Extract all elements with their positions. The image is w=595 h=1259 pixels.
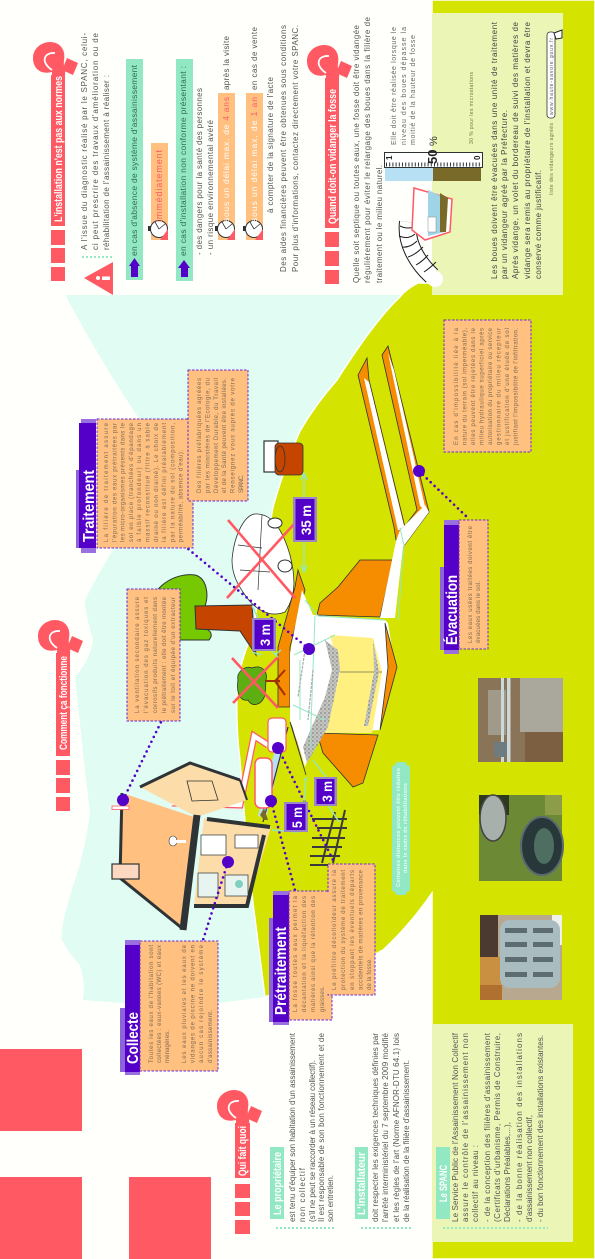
big tree — [150, 575, 256, 655]
description: drainé ou non drainé). Le choix de — [154, 422, 160, 542]
panel: impossibility note: autorisation du propriétaire ou service — [488, 327, 494, 445]
case: no system: en cas d'absence de système d'assainissement — [129, 64, 139, 256]
section: emptying the tank — [307, 13, 563, 295]
prefab text: Renseignez vous auprès de votre — [231, 377, 237, 493]
disposal text: Après vidange, un volet du bordereau de suivi des matières de — [511, 21, 520, 279]
intro text: réhabilitation de l'assainissement à réaliser : — [102, 75, 111, 250]
description: accidentels de matières en provenance — [358, 869, 364, 990]
owner text: non collectif — [298, 1167, 307, 1222]
closing text: Pour plus d'informations, contactez directement votre SPANC. — [291, 25, 300, 272]
panel: traitement — [76, 370, 248, 553]
description: Le Service Public de l'Assainissement Non Collectif — [451, 1032, 460, 1222]
drains — [358, 346, 429, 620]
description: Le préfiltre décolloïdeur assure la — [332, 869, 338, 990]
owner text — [288, 1032, 335, 1222]
description: (Certificats d'urbanisme, Permis de Construire, — [493, 1033, 502, 1222]
title: Collecte — [125, 1012, 142, 1064]
disposal text: Les boues doivent être évacuées dans une unité de traitement — [490, 21, 499, 279]
prefab box — [188, 370, 248, 501]
description: assure le contrôle de l'assainissement non — [461, 1033, 470, 1222]
closing text: à compter de la signature de l'acte — [266, 76, 275, 213]
description: vidanges de piscine ne doivent en — [190, 945, 196, 1063]
photo: manholes — [479, 795, 563, 881]
gauge 50 percent: 50 — [425, 150, 440, 164]
title: Évacuation — [442, 575, 461, 645]
question mark icon — [307, 45, 352, 78]
gauge 50 percent: 1 — [385, 155, 394, 160]
description — [104, 422, 185, 542]
question mark icon — [217, 1090, 262, 1123]
description: perméabilité, absence d'eau). — [179, 450, 185, 542]
description: matières ainsi que la rétention des — [311, 896, 317, 1012]
description: d'assainissement. — [208, 1010, 214, 1063]
delay: immediately — [148, 143, 168, 240]
distance label 5 m: 5 m — [289, 807, 305, 828]
description: par la nature du sol (composition, — [170, 423, 176, 542]
description: Les eaux pluviales et les eaux de — [182, 944, 188, 1063]
sky background — [62, 295, 420, 1003]
prefab text: par les ministères de l'Ecologie, du — [205, 378, 211, 493]
level note: Elle doit être réalisée lorsque le — [391, 27, 398, 145]
distance label 3 m top — [252, 618, 276, 651]
prefab text: Des filières préfabriquées agréées — [197, 378, 203, 493]
description: graisses. — [320, 986, 326, 1012]
panel: ventilation: La ventilation secondaire assure — [135, 596, 141, 713]
delay: 1 year: sous un délai max. de 1 an — [249, 97, 259, 222]
heading — [235, 1123, 250, 1234]
lime ground — [237, 0, 595, 1259]
delay: 4 years: sous un délai max. de 4 ans — [221, 97, 231, 222]
panel: impossibility note: justifiant l'impossibilité de l'infiltration. — [514, 328, 520, 446]
link pill: liste des vidangeurs agréés — [549, 122, 555, 195]
well — [264, 441, 303, 475]
gauge 50 percent: 0 — [473, 155, 482, 160]
note: reduced distances — [392, 762, 410, 895]
case: non compliant: en cas d'installation non conforme présentant : — [178, 66, 188, 256]
heading: Quand doit-on vidanger la fosse — [327, 89, 339, 224]
panel: pretraitement — [269, 864, 375, 1025]
intro text — [352, 16, 384, 283]
intro text: ci peut prescrire des travaux d'amélioration ou de — [91, 32, 100, 250]
panel: ventilation: sur le toit et équipée d'un extracteur — [171, 597, 177, 713]
description: les micro-organismes présents dans le — [121, 422, 127, 542]
description: d'assainissement non collectif, — [525, 1115, 534, 1222]
owner text: Il est responsable de son bon fonctionnement et de — [317, 1032, 326, 1222]
title — [76, 419, 98, 553]
case: no system — [126, 59, 143, 280]
treatment trench — [278, 560, 397, 787]
description: la filière est défini préalablement — [162, 423, 168, 542]
panel: ventilation — [127, 589, 180, 721]
panel: le SPANC — [432, 1024, 573, 1242]
description: - de la conception des filières d'assainissement — [483, 1032, 492, 1222]
description: aucun cas rejoindre le système — [199, 944, 205, 1063]
panel: collecte — [120, 940, 218, 1075]
pretreatment tank and pipe — [172, 718, 305, 822]
prefab text: Développement Durable, du Travail — [214, 378, 220, 493]
installer label: L'installateur — [356, 1151, 368, 1215]
description: ménagères. — [165, 1030, 171, 1063]
description: l'épuration des eaux prétraitées par — [112, 423, 118, 542]
panel: ventilation: l'évacuation des gaz toxiques et — [144, 597, 150, 713]
section: how it works heading — [38, 620, 83, 811]
heading: Qui fait quoi — [237, 1126, 249, 1176]
description: Déclarations Préalables,...), — [503, 1122, 512, 1222]
delay: 4 years — [215, 35, 235, 240]
risk list: - des dangers pour la santé des personnes — [195, 88, 204, 255]
case: non compliant — [176, 59, 193, 281]
installer text — [371, 1032, 411, 1222]
owner text: son entretien. — [326, 1175, 335, 1222]
intro text: Quelle soit septique ou toutes eaux, une fosse doit être vidangée — [352, 24, 361, 283]
panel: impossibility note: nature du terrain (sol imperméable), — [462, 328, 468, 445]
description: La fosse toutes eaux permet la — [293, 895, 299, 1012]
distance label 3 m bottom — [314, 777, 337, 806]
photo: drains in gravel — [478, 678, 563, 762]
description: protection du système de traitement — [341, 870, 347, 990]
small tree with cross — [237, 667, 285, 705]
title: Prétraitement — [273, 926, 290, 1015]
intro text: régulièrement pour éviter le relargage des boues dans la filière de — [363, 16, 372, 283]
prefab text: et de la Santé peuvent être installées. — [222, 378, 228, 493]
description: décantation et la liquéfaction des — [302, 896, 308, 1012]
description: massif reconstitué (filtre à sable — [146, 422, 152, 542]
delay: 4 years: après la visite — [222, 35, 231, 90]
gauge 50 percent — [384, 136, 482, 181]
level note: niveau des boues dépasse la — [401, 27, 408, 145]
distance label 3 m bottom: 3 m — [319, 781, 335, 802]
panel: impossibility note: milieu hydraulique superficiel après — [480, 328, 486, 445]
description — [149, 944, 214, 1063]
panel: impossibility note: gestionnaire du milieu récepteur — [496, 328, 502, 445]
disposal text: par un vidangeur agréé par la Préfecture. — [500, 110, 509, 279]
installer text: et les règles de l'art (Norme AFNOR-DTU 64.1) lois — [392, 1033, 401, 1222]
disposal text: vidange sera remis au propriétaire de l'installation et devra être — [523, 21, 532, 279]
heading — [51, 75, 65, 281]
panel: impossibility note — [444, 320, 531, 452]
closing text — [266, 25, 300, 272]
closing text: Des aides financières peuvent être obtenues sous conditions — [279, 25, 288, 272]
distance label 35 m — [293, 497, 317, 542]
panel: ventilation: le prétraitement : elle doit être montée — [162, 596, 168, 713]
description: de la fosse. — [367, 958, 373, 990]
description — [468, 525, 482, 643]
description: La filière de traitement assure — [104, 422, 110, 542]
title — [269, 891, 290, 1025]
warning icon — [84, 262, 113, 295]
crosses — [227, 520, 295, 708]
pink blocks — [0, 1049, 211, 1259]
fence — [310, 810, 347, 865]
distance label 35 m: 35 m — [298, 505, 314, 535]
intro text: traitement ou le milieu naturel. — [375, 165, 384, 283]
description: sol en place (tranchées d'épandage — [129, 422, 135, 542]
intro text: A l'issue du diagnostic réalisé par le SPANC, celui- — [80, 33, 89, 250]
panel: impossibility note: elles peuvent être rejetées dans le — [471, 327, 477, 445]
heading: L'installation n'est pas aux normes — [53, 76, 65, 222]
panel: impossibility note: et justification d'une étude de sol — [505, 328, 511, 445]
risk list — [195, 88, 215, 255]
intro text — [80, 32, 111, 250]
description: collectif au niveau : — [471, 1145, 480, 1222]
label — [436, 1147, 450, 1219]
prefab text — [197, 377, 245, 493]
gauge 50 percent: % — [428, 136, 440, 146]
owner text: (s'il ne peut se raccorder à un réseau collectif). — [308, 1060, 317, 1222]
owner text: est tenu d'équiper son habitation d'un assainissement — [288, 1032, 297, 1222]
panel: evacuation — [440, 520, 488, 654]
note: reduced distances: Certaines distances peuvent être réduites — [396, 768, 402, 887]
panel: ventilation: corrosifs produits naturellement dans — [153, 597, 159, 713]
prefab text: SPANC. — [239, 475, 245, 493]
distance arrows — [252, 473, 339, 832]
description: Toutes les eaux de l'habitation sont — [149, 945, 155, 1063]
panel: impossibility note: En cas d'impossibilité liée à la — [454, 327, 460, 445]
title: Traitement — [81, 469, 98, 542]
delay: 1 year — [243, 26, 263, 240]
delay: 1 year: en cas de vente — [250, 26, 259, 90]
distance label 5 m — [284, 802, 308, 832]
installer text: doit respecter les exigences techniques définies par — [371, 1033, 380, 1222]
disposal text: conservé comme justificatif. — [534, 170, 543, 279]
panel background — [432, 13, 563, 295]
photo: prefab tank — [480, 915, 562, 1000]
section: how it works heading: Comment ça fonctionne — [58, 656, 70, 750]
note: reduced distances: dans le cadre de réhabilitations — [403, 783, 409, 873]
icon: tank and hose — [399, 188, 452, 287]
owner label: Le propriétaire — [272, 1152, 284, 1215]
question mark icon — [33, 42, 78, 75]
section: who does what — [217, 1032, 412, 1234]
label: Le SPANC — [438, 1165, 450, 1202]
description: Les eaux usées traitées doivent être — [468, 525, 474, 643]
description: - de la bonne réalisation des installations — [515, 1033, 524, 1222]
description: à faible profondeur) ou dans un — [137, 423, 143, 542]
level note — [391, 27, 417, 145]
dotted leader lines — [123, 471, 468, 940]
disposal text — [490, 21, 543, 279]
distance label 3 m top: 3 m — [257, 624, 273, 646]
installer text: l'arrêté interministériel du 7 septembre 2009 modifié — [381, 1032, 390, 1222]
link pill: www.haute-savoie.gouv.fr — [549, 38, 555, 115]
heading — [325, 78, 339, 284]
description — [293, 869, 373, 1012]
risk list: - un risque environnemental avéré — [206, 119, 215, 255]
small note microstations: 30 % pour les microstations — [469, 72, 475, 144]
illustration: system diagram — [112, 346, 429, 930]
description: - du bon fonctionnement des installations existantes. — [536, 1035, 545, 1222]
delay: immediately: immédiatement — [154, 150, 164, 222]
link pill — [547, 30, 562, 195]
section: installation not compliant — [33, 25, 300, 295]
description: collectées : eaux-vannes (WC) et eaux — [157, 945, 163, 1063]
connector dots — [117, 465, 425, 868]
installer text: de la réalisation de la filière d'assainissement. — [402, 1060, 411, 1222]
ornamental shrub with cross — [232, 514, 294, 614]
description: en stoppant les éventuels départs — [350, 870, 356, 990]
description: évacuées dans le sol. — [476, 581, 482, 643]
text box — [97, 419, 193, 548]
description — [451, 1032, 545, 1222]
level note: moitié de la hauteur de fosse — [410, 35, 417, 145]
house — [112, 763, 271, 930]
